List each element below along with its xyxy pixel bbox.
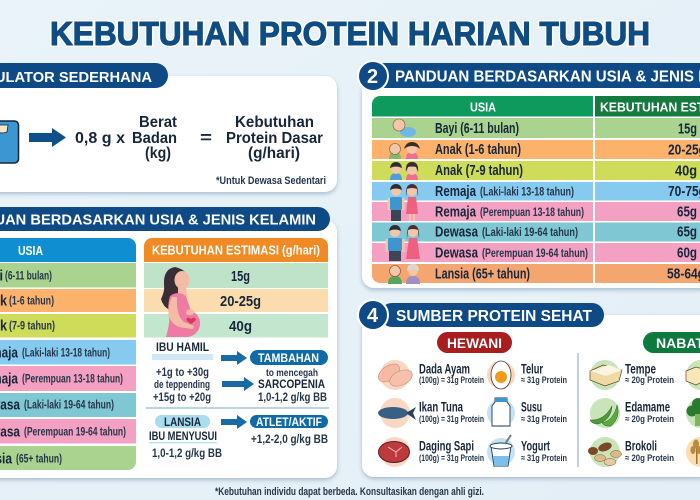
callout: lansia ibu menyusui: 1,0-1,2 g/kg BB	[152, 446, 222, 460]
icon: elderly	[388, 264, 420, 284]
icon: tofu	[686, 360, 700, 390]
item: ikan tuna	[378, 398, 484, 428]
formula: factor: 0,8 g x	[75, 130, 125, 147]
arrow: hamil to tambahan	[221, 351, 247, 365]
table: usia kanan: (Perempuan 13-18 tahun)	[480, 207, 584, 219]
item: dada ayam	[375, 360, 484, 390]
icon: teens	[388, 184, 418, 221]
formula: equals: =	[200, 128, 212, 147]
icon: broccoli	[686, 398, 700, 428]
title: KEBUTUHAN PROTEIN HARIAN TUBUH	[50, 15, 650, 52]
formula: weight: Berat	[139, 114, 177, 131]
arrow: hamil to sarcopenia	[222, 377, 254, 391]
table: usia kanan: Dewasa	[435, 224, 479, 240]
panel: kalkulator sederhana	[0, 63, 337, 192]
arrow: lansia to atlet	[221, 415, 247, 429]
table: usia kiri: (Laki-laki 13-18 tahun)	[22, 348, 110, 360]
panel: panduan kanan	[358, 61, 700, 288]
item: brokoli	[588, 437, 674, 467]
callout: lansia ibu menyusui: IBU MENYUSUI	[149, 431, 217, 443]
table: usia kanan: (Laki-laki 13-18 tahun)	[480, 186, 574, 198]
table: usia kiri: (1-6 tahun)	[9, 296, 54, 308]
table: usia kanan	[372, 96, 700, 284]
icon: children 1-6	[389, 142, 420, 159]
heading: kalkulator sederhana	[0, 63, 168, 88]
table: usia kanan: Anak (1-6 tahun)	[435, 142, 521, 158]
table: usia kanan: (Perempuan 19-64 tahun)	[482, 248, 588, 260]
icon: wheat	[686, 437, 700, 467]
callout: atlet aktif	[250, 415, 328, 446]
text: ibu hamil: IBU HAMIL	[156, 342, 209, 354]
label: hewani	[437, 332, 512, 353]
table: usia kanan: Dewasa	[435, 246, 479, 262]
callout: tambahan	[250, 350, 328, 404]
formula: weight: Badan	[132, 130, 177, 147]
table: kebutuhan estimasi kiri: 15g	[231, 268, 250, 285]
heading: sumber protein sehat	[380, 303, 604, 327]
item: yogurt: Yogurt	[521, 438, 550, 454]
table: usia kiri: (Perempuan 19-64 tahun)	[24, 426, 126, 438]
table: usia kiri	[0, 238, 136, 470]
table: usia kiri: (65+ tahun)	[16, 454, 62, 466]
table: usia kiri: USIA	[18, 243, 43, 258]
badge: number 2: 2	[367, 66, 378, 88]
icon: scale	[0, 121, 18, 163]
footer note: *Kebutuhan individu dapat berbeda. Konsultasikan dengan ahli gizi.	[215, 486, 484, 498]
formula: result	[226, 114, 323, 162]
callout: lansia ibu menyusui	[149, 415, 222, 460]
item: tempe: Tempe	[625, 362, 656, 376]
icon: pregnant woman	[161, 267, 200, 337]
item: edamame	[590, 398, 674, 428]
formula: result: (g/hari)	[248, 145, 300, 162]
formula: weight: (kg)	[145, 145, 171, 162]
item: daging sapi: Daging Sapi	[419, 438, 474, 454]
table: usia kiri: (7-9 tahun)	[9, 320, 55, 332]
callout: atlet aktif: ATLET/AKTIF	[256, 417, 322, 429]
table: kebutuhan estimasi kiri	[144, 238, 328, 338]
callout: tambahan: 1,0-1,2 g/kg BB	[258, 390, 327, 404]
text: ibu hamil: +1g to +30g	[156, 365, 209, 379]
table: usia kanan: Lansia (65+ tahun)	[435, 266, 530, 282]
callout: atlet aktif: +1,2-2,0 g/kg BB	[251, 432, 328, 446]
item: daging sapi	[378, 437, 484, 467]
item: edamame: ≈ 20g Protein	[625, 414, 674, 425]
text: ibu hamil	[152, 342, 213, 404]
icon: children 7-9	[390, 162, 418, 180]
table: usia kiri: (Laki-laki 19-64 tahun)	[24, 400, 114, 412]
table: usia kiri: (6-11 bulan)	[5, 270, 52, 282]
callout: tambahan: TAMBAHAN	[258, 351, 319, 365]
arrow: to formula	[29, 128, 66, 147]
table: usia kanan: 40g	[675, 164, 697, 180]
table: usia kanan: USIA	[470, 100, 497, 114]
item: susu: ≈ 31g Protein	[521, 414, 567, 425]
item: yogurt	[487, 435, 567, 466]
table: usia kanan: Remaja	[435, 184, 477, 200]
formula: weight	[132, 114, 177, 162]
item: yogurt: ≈ 31g Protein	[521, 453, 567, 464]
table: kebutuhan estimasi kiri: 20-25g	[220, 293, 261, 310]
table: usia kanan: Remaja	[435, 204, 477, 220]
table: kebutuhan estimasi kiri: KEBUTUHAN ESTIMASI (g/hari)	[152, 242, 320, 258]
icon: baby	[393, 119, 416, 137]
table: usia kanan: Anak (7-9 tahun)	[435, 163, 523, 179]
callout: tambahan: to mencegah	[266, 367, 318, 379]
callout: tambahan: SARCOPENIA	[258, 377, 325, 391]
item: brokoli: ≈ 20g Protein	[625, 453, 674, 464]
label: hewani: HEWANI	[447, 335, 502, 351]
item: ikan tuna: (100g) = 31g Protein	[419, 414, 484, 425]
item: ikan tuna: Ikan Tuna	[419, 400, 463, 414]
badge: number 2	[358, 61, 388, 91]
footnote: sedentary: *Untuk Dewasa Sedentari	[216, 175, 326, 187]
title: KEBUTUHAN PROTEIN HARIAN TUBUH	[50, 15, 650, 52]
badge: number 4	[358, 300, 388, 330]
label: nabati	[643, 332, 700, 353]
item: tempe: ≈ 20g Protein	[625, 375, 674, 386]
panel: sumber protein sehat	[358, 300, 700, 477]
table: kebutuhan estimasi kiri: 40g	[229, 318, 252, 335]
icon: adults	[386, 225, 420, 261]
item: dada ayam: (100g) = 31g Protein	[419, 375, 484, 386]
item: telur: Telur	[521, 362, 544, 376]
item: daging sapi: (100g) = 31g Protein	[419, 453, 484, 464]
item: brokoli: Brokoli	[625, 438, 657, 454]
badge: number 4: 4	[367, 305, 379, 327]
heading: panduan kiri	[0, 207, 330, 231]
panel: panduan kiri	[0, 207, 337, 478]
item: telur: ≈ 31g Protein	[521, 375, 567, 386]
table: usia kanan: (Laki-laki 19-64 tahun)	[482, 227, 578, 239]
item: tempe	[590, 360, 674, 390]
item: dada ayam: Dada Ayam	[419, 362, 470, 376]
item: telur	[487, 361, 567, 389]
heading: panduan kanan	[380, 63, 700, 88]
table: usia kanan: Bayi (6-11 bulan)	[435, 121, 519, 137]
formula: result: Kebutuhan	[235, 114, 314, 131]
item: susu: Susu	[521, 400, 542, 414]
item: edamame: Edamame	[625, 400, 670, 414]
text: ibu hamil: de teppending	[154, 379, 210, 391]
heading: sumber protein sehat: SUMBER PROTEIN SEHAT	[396, 308, 592, 325]
text: ibu hamil: +15g to +20g	[153, 390, 211, 404]
table: usia kiri: (Perempuan 13-18 tahun)	[22, 374, 123, 386]
formula: result: Protein Dasar	[226, 130, 323, 147]
callout: lansia ibu menyusui: LANSIA	[164, 417, 201, 429]
item: susu	[487, 398, 567, 427]
